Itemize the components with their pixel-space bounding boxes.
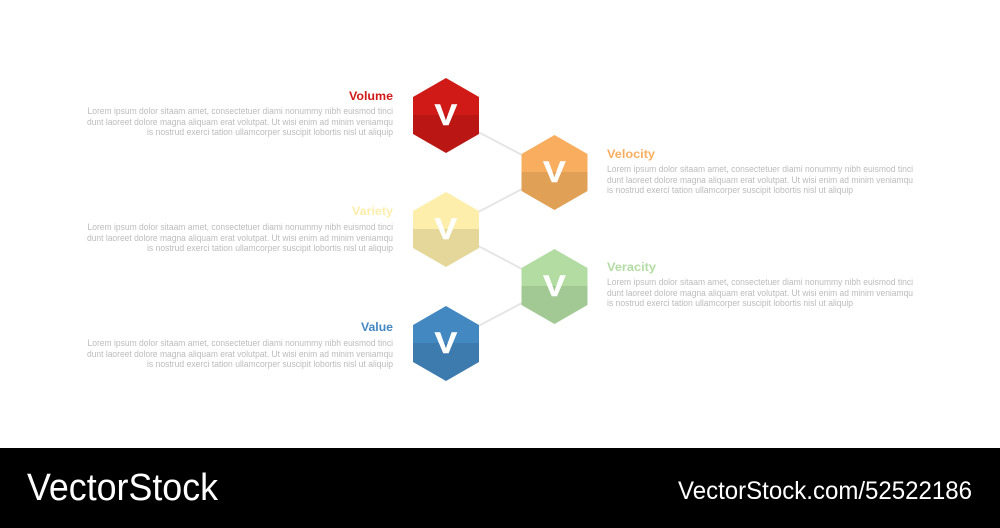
- text block: Volume: is nostrud exerci tation ullamcorper suscipit lobortis nisl ut aliquip: [147, 127, 393, 138]
- footer logo text: VectorStock: [27, 467, 219, 509]
- text block: Variety: is nostrud exerci tation ullamcorper suscipit lobortis nisl ut aliquip: [147, 243, 393, 254]
- icon letter: Variety V: V: [435, 213, 457, 246]
- text block: Volume: [87, 89, 393, 138]
- text block: Value: Lorem ipsum dolor sitaam amet, consectetuer diami nonummy nibh euismod tinci: [88, 338, 393, 349]
- text block: Volume: dunt laoreet dolore magna aliquam erat volutpat. Ut wisi enim ad minim veniamqu: [87, 117, 393, 128]
- text block: Velocity: Lorem ipsum dolor sitaam amet, consectetuer diami nonummy nibh euismod tinci: [607, 164, 913, 175]
- text block: Value: Value: [361, 320, 393, 334]
- text block: Volume: Lorem ipsum dolor sitaam amet, consectetuer diami nonummy nibh euismod tinci: [88, 106, 393, 117]
- text block: Velocity: dunt laoreet dolore magna aliquam erat volutpat. Ut wisi enim ad minim veniamqu: [607, 175, 913, 186]
- text block: Variety: dunt laoreet dolore magna aliquam erat volutpat. Ut wisi enim ad minim veniamqu: [87, 233, 393, 244]
- text block: Variety: [87, 204, 393, 254]
- icon letter: Veracity V: V: [543, 270, 566, 303]
- hexagon: Value: [413, 306, 479, 381]
- text block: Value: dunt laoreet dolore magna aliquam erat volutpat. Ut wisi enim ad minim veniamqu: [87, 349, 393, 360]
- text block: Variety: Lorem ipsum dolor sitaam amet, consectetuer diami nonummy nibh euismod tinci: [88, 222, 393, 233]
- text block: Veracity: Veracity: [607, 260, 656, 274]
- hexagon: Variety: [413, 192, 479, 267]
- footer bar: [0, 448, 1000, 528]
- text block: Value: [87, 320, 393, 370]
- hexagon: Volume: [413, 78, 479, 153]
- icon letter: Velocity V: V: [543, 156, 566, 189]
- text block: Veracity: [607, 260, 913, 309]
- hexagon: Veracity: [522, 249, 588, 324]
- icon letter: Value V: V: [435, 327, 457, 360]
- text block: Variety: Variety: [352, 204, 393, 218]
- text block: Velocity: Velocity: [607, 147, 655, 161]
- text block: Velocity: [607, 147, 913, 196]
- icon letter: Volume V: V: [435, 99, 457, 132]
- text block: Veracity: Lorem ipsum dolor sitaam amet, consectetuer diami nonummy nibh euismod tinci: [607, 277, 913, 288]
- footer image id: VectorStock.com/52522186: [678, 477, 972, 505]
- text block: Volume: Volume: [349, 89, 393, 103]
- text block: Velocity: is nostrud exerci tation ullamcorper suscipit lobortis nisl ut aliquip: [607, 185, 853, 196]
- hexagon: Velocity: [522, 135, 588, 210]
- text block: Veracity: is nostrud exerci tation ullamcorper suscipit lobortis nisl ut aliquip: [607, 298, 853, 309]
- text block: Value: is nostrud exerci tation ullamcorper suscipit lobortis nisl ut aliquip: [147, 359, 393, 370]
- text block: Veracity: dunt laoreet dolore magna aliquam erat volutpat. Ut wisi enim ad minim veniamqu: [607, 288, 913, 299]
